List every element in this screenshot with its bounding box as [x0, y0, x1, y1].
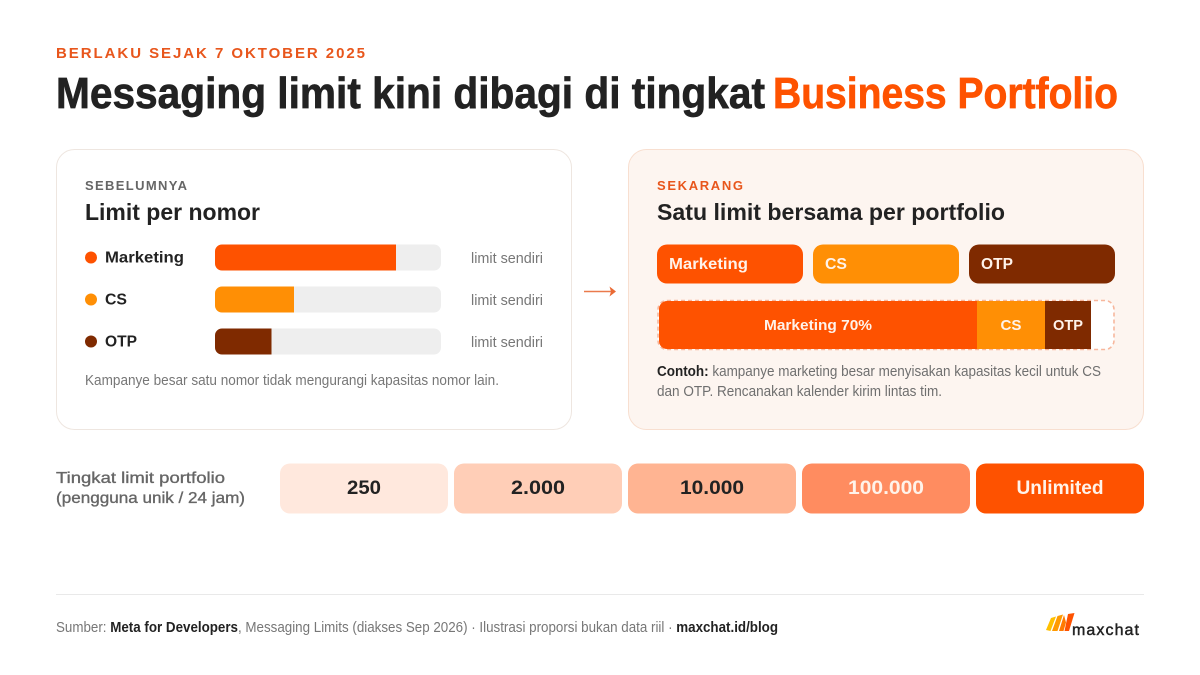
panel: before — [56, 150, 572, 430]
arrow: before to now — [584, 286, 616, 296]
tier: Unlimited — [976, 464, 1144, 514]
segment: OTP: OTP — [1053, 317, 1083, 334]
tier: 250: 250 — [347, 478, 381, 499]
row: CS: CS — [105, 292, 127, 308]
row: OTP: OTP — [105, 334, 137, 350]
tier: 2.000 — [454, 464, 622, 514]
row: Marketing: limit sendiri — [471, 250, 543, 267]
now note: dan OTP. Rencanakan kalender kirim lintas tim. — [657, 384, 942, 400]
row: OTP: limit sendiri — [471, 334, 543, 351]
tier: 10.000 — [628, 464, 796, 514]
segment: OTP — [1045, 301, 1091, 349]
logo: maxchat — [1046, 613, 1140, 639]
pill: OTP: OTP — [981, 256, 1013, 273]
panel: now — [628, 150, 1144, 430]
row: Marketing — [85, 244, 543, 270]
tier: 100.000: 100.000 — [848, 478, 924, 499]
title: Messaging limit kini dibagi di tingkat — [56, 70, 765, 118]
tier: 10.000: 10.000 — [680, 478, 744, 499]
row: OTP — [85, 328, 543, 354]
eyebrow: effective date: BERLAKU SEJAK 7 OKTOBER 2025 — [56, 45, 365, 62]
pill: CS — [813, 244, 959, 284]
row: CS: limit sendiri — [471, 292, 543, 309]
icon: logo mark — [1046, 613, 1074, 631]
tier: Unlimited: Unlimited — [1016, 478, 1104, 499]
row: CS — [85, 286, 543, 312]
now note — [657, 364, 1101, 400]
before label: SEBELUMNYA — [85, 178, 188, 193]
pill: CS: CS — [825, 256, 847, 273]
pill: Marketing — [657, 244, 803, 284]
stacked capacity bar — [658, 300, 1114, 350]
tier label: (pengguna unik / 24 jam) — [56, 490, 245, 507]
logo wordmark: maxchat — [1072, 622, 1140, 639]
tier label — [56, 470, 245, 507]
pill: Marketing: Marketing — [669, 256, 748, 273]
segment: Marketing 70%: Marketing 70% — [764, 317, 872, 334]
row: Marketing: Marketing — [105, 250, 184, 266]
pill: OTP — [969, 244, 1115, 284]
now note: Contoh: kampanye marketing besar menyisakan kapasitas kecil untuk CS — [657, 364, 1101, 380]
source footer: Sumber: Meta for Developers, Messaging Limits (diakses Sep 2026) · Ilustrasi proporsi bukan data riil · maxchat.id/blog — [56, 620, 778, 636]
tier label: Tingkat limit portfolio — [56, 470, 225, 487]
segment: Marketing 70% — [659, 301, 977, 349]
title: Business Portfolio — [773, 70, 1118, 118]
now label: SEKARANG — [657, 178, 743, 193]
now heading: Satu limit bersama per portfolio — [657, 199, 1005, 225]
tier: 2.000: 2.000 — [511, 478, 565, 499]
segment: CS: CS — [1000, 317, 1022, 334]
tier: 100.000 — [802, 464, 970, 514]
tier: 250 — [280, 464, 448, 514]
segment: CS — [977, 301, 1045, 349]
before note: Kampanye besar satu nomor tidak mengurangi kapasitas nomor lain. — [85, 373, 499, 389]
before heading: Limit per nomor — [85, 199, 260, 225]
